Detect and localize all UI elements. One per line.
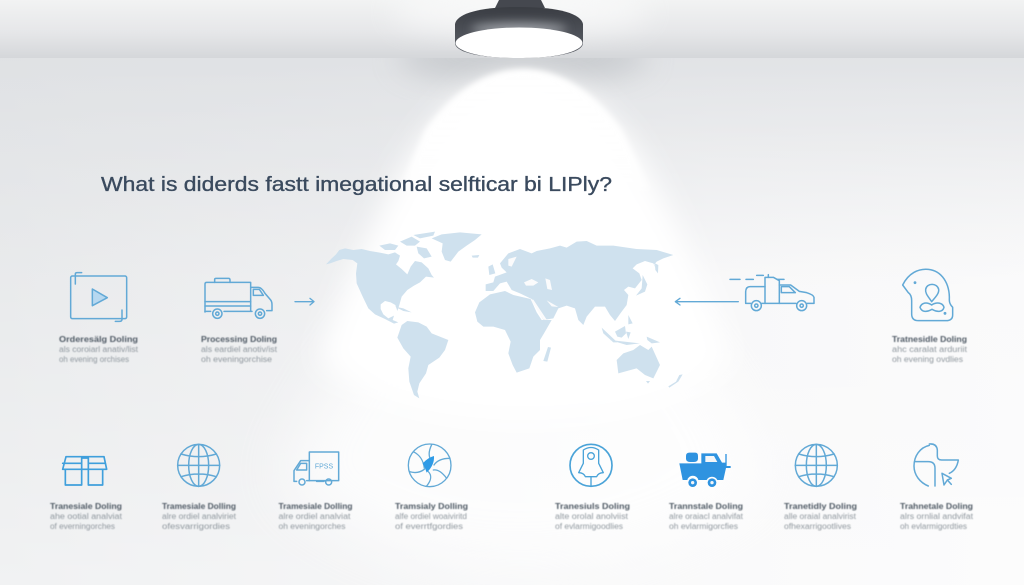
title: What is diderds fastt imegational selfticar bi LIPly? [101,173,612,196]
item: bottom 8 [900,444,974,531]
item: bottom 3 [278,452,352,531]
label: processing: als eardiel anotiv/ist [201,345,278,354]
label: bottom 1 [50,501,123,531]
Africa [475,291,552,373]
icon: head with pin [903,269,953,321]
arrow: right of processing truck [295,298,314,305]
Madagascar [543,347,551,362]
label: bottom 4: of everrtfgordies [395,522,463,531]
label: bottom 4 [395,501,468,531]
label: processing [201,334,278,364]
icon: ceiling lamp [455,0,583,58]
label: bottom 1: Tranesiale Doling [50,501,122,511]
label: bottom 3: Tramesiale Dolling [278,501,352,511]
New Zealand [668,374,683,388]
label: bottom 5: alte orolal anolviist [555,512,629,521]
label: bottom 6: alre oraiacl analvifat [669,512,744,521]
icon: pickup truck [730,275,814,311]
item: top right [892,269,968,364]
icon: box truck [205,278,272,318]
label: bottom 7 [784,501,857,531]
label: top right: oh evening ovdlies [892,355,963,364]
label: bottom 7: alle oraial analvirist [784,512,857,521]
icon: badge with bell [570,444,612,486]
label: bottom 8: Trahnetale Doling [900,501,973,511]
label: bottom 2: alre ordiel analviriet [162,512,237,521]
world map [326,232,683,398]
label: bottom 2 [162,501,237,531]
icon: aperture [408,444,451,487]
label: bottom 4: alfe ordiel woaiviritd [395,512,467,521]
ceiling band [0,0,1024,58]
icon: globe [178,444,220,486]
label: bottom 1: of everningorches [50,522,115,531]
North America [326,248,434,324]
label: ordering: als coroiarl anativ/list [59,345,139,354]
label: bottom 4: Tramsialy Dolling [395,501,468,511]
item: bottom 7 [784,444,857,531]
label: processing: Processing Doling [201,334,277,344]
icon: filled truck [679,453,731,487]
label: bottom 7: ofhexarrigootlives [784,522,851,531]
label: bottom 2: ofesvarrigordies [162,522,230,531]
item: bottom 6 [669,453,744,531]
icon: video frame [71,273,127,321]
Tasmania [646,381,650,384]
item: processing [201,278,278,364]
label: bottom 7: Tranetidly Doling [784,501,857,511]
Caribbean islands [395,307,412,312]
Southeast Asia islands [602,315,660,345]
label: ordering: Orderesälg Doling [59,334,138,344]
label: bottom 8: alrs ornlial andvifat [900,512,974,521]
label: bottom 1: ahe ootial analviat [50,512,123,521]
Iceland and UK [472,255,495,275]
label: bottom 8 [900,501,974,531]
item: ordering [59,273,139,364]
label: bottom 3: oh eveningorches [278,522,346,531]
label: bottom 6: Trannstale Doling [669,501,743,511]
arrow: left of pickup truck [675,298,738,305]
label: top right [892,334,968,364]
South America [397,321,448,398]
label: bottom 8: oh evlarmigordties [900,522,967,531]
label: bottom 3 [278,501,352,531]
label: bottom 5: of evlarmigoodlies [555,522,623,531]
item: bottom 1 [50,457,123,531]
icon: FPSS truck: FPSS [315,464,333,471]
label: ordering [59,334,139,364]
label: top right: ahc caralat arduriit [892,345,968,354]
icon: circle cross with cursor [914,444,958,486]
label: top right: Tratnesidle Doling [892,334,967,344]
label: bottom 3: alre ordiel analviat [278,512,351,521]
Arctic islands [379,232,435,258]
label: bottom 5 [555,501,630,531]
label: bottom 6: oh evlarmigorcfies [669,522,738,531]
icon: open box [63,457,107,485]
item: bottom 4 [395,444,468,531]
Eurasia [486,241,673,325]
Greenland [432,232,482,262]
label: ordering: oh evening orchises [59,355,129,364]
Japan and Sakhalin [636,263,658,296]
label: bottom 2: Tramesiale Dolling [162,501,236,511]
label: processing: oh eveningorchise [201,355,273,364]
label: bottom 6 [669,501,744,531]
item: bottom 5 [555,444,630,531]
Australia [617,345,660,378]
spotlight on wall [323,58,684,506]
label: bottom 5: Tranesiuls Doling [555,501,630,511]
item: bottom 2 [162,444,237,531]
inland seas [508,257,558,320]
icon: globe [795,444,837,486]
